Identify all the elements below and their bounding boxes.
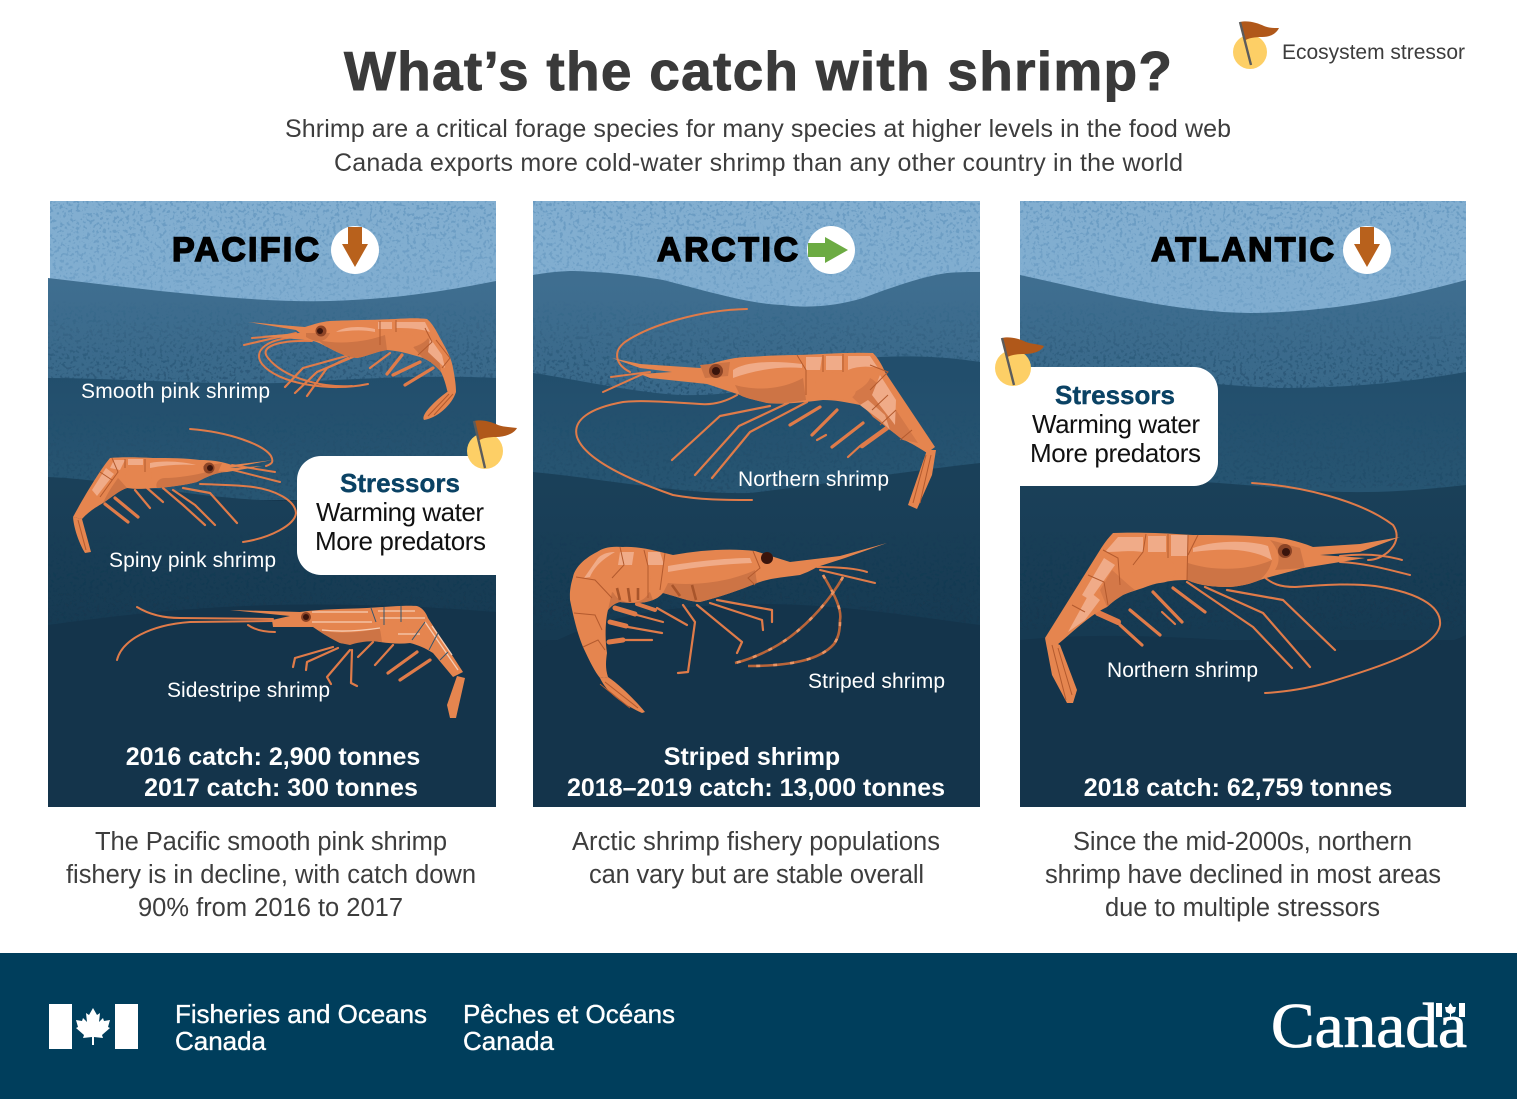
label: northern shrimp (atlantic): Northern shrimp (1107, 659, 1258, 682)
label: striped shrimp: Striped shrimp (808, 670, 945, 693)
label: northern shrimp (arctic): Northern shrimp (738, 468, 889, 491)
callout: pacific stressors: More predators (315, 526, 486, 556)
shrimp: spiny pink (73, 429, 296, 553)
shrimp: sidestripe (117, 606, 465, 718)
callout: atlantic stressors (995, 337, 1218, 486)
caption: atlantic (1045, 828, 1441, 922)
heading: atlantic: ATLANTIC (1151, 231, 1334, 269)
caption: atlantic: Since the mid-2000s, northern (1073, 828, 1412, 856)
icon: stressor flag (995, 337, 1044, 386)
caption: pacific: The Pacific smooth pink shrimp (95, 828, 447, 856)
text: department name french: Pêches et Océans (463, 999, 675, 1029)
wordmark: canada: Canada (1271, 991, 1467, 1061)
catch figures: pacific: 2016 catch: 2,900 tonnes (126, 743, 420, 771)
callout: pacific stressors (297, 420, 517, 575)
icon: down arrow (1343, 226, 1391, 274)
subtitle: Shrimp are a critical forage species for many species at higher levels in the food web (285, 115, 1231, 143)
panel: atlantic (995, 201, 1466, 807)
icon: stressor flag (1233, 21, 1279, 69)
text: department name english (175, 999, 427, 1056)
legend: ecosystem stressor (1233, 21, 1465, 69)
shrimp: northern (atlantic) (1045, 483, 1440, 703)
subtitle (285, 115, 1231, 177)
panel: pacific (48, 201, 517, 807)
text: department name english: Fisheries and Oceans (175, 999, 427, 1029)
catch figures: arctic: 2018–2019 catch: 13,000 tonnes (567, 774, 945, 802)
legend: ecosystem stressor: Ecosystem stressor (1282, 41, 1465, 64)
subtitle: Canada exports more cold-water shrimp than any other country in the world (334, 149, 1183, 177)
icon: down arrow (331, 226, 379, 274)
heading: arctic: ARCTIC (657, 231, 798, 269)
catch figures: arctic: Striped shrimp (664, 743, 840, 771)
catch figures: pacific: 2017 catch: 300 tonnes (144, 774, 418, 802)
footer (0, 953, 1517, 1099)
catch figures: arctic (567, 743, 945, 802)
shrimp: northern (arctic) (576, 309, 936, 509)
caption: pacific (66, 828, 476, 922)
callout: atlantic stressors: More predators (1030, 438, 1201, 468)
shrimp: smooth pink (244, 318, 456, 420)
caption: arctic: can vary but are stable overall (589, 861, 924, 889)
caption: pacific: 90% from 2016 to 2017 (138, 894, 403, 922)
catch figures: atlantic: 2018 catch: 62,759 tonnes (1084, 774, 1392, 802)
text: department name english: Canada (175, 1026, 267, 1056)
caption: pacific: fishery is in decline, with catch down (66, 861, 476, 889)
callout: atlantic stressors: Warming water (1032, 409, 1200, 439)
label: spiny pink shrimp: Spiny pink shrimp (109, 549, 276, 572)
callout: pacific stressors: Stressors (340, 468, 460, 498)
panel: arctic (533, 201, 980, 807)
callout: atlantic stressors: Stressors (1055, 380, 1175, 410)
icon: stressor flag (467, 420, 517, 469)
title: What’s the catch with shrimp? (344, 40, 1172, 102)
icon: canada flag (49, 1004, 138, 1049)
caption: atlantic: shrimp have declined in most areas (1045, 861, 1441, 889)
shrimp: striped (570, 543, 887, 713)
label: smooth pink shrimp: Smooth pink shrimp (81, 380, 270, 403)
text: department name french: Canada (463, 1026, 555, 1056)
label: sidestripe shrimp: Sidestripe shrimp (167, 679, 330, 702)
catch figures: pacific (126, 743, 420, 802)
callout: pacific stressors: Warming water (316, 497, 484, 527)
heading: pacific: PACIFIC (172, 231, 319, 269)
caption: arctic (572, 828, 940, 889)
caption: atlantic: due to multiple stressors (1105, 894, 1380, 922)
icon: right arrow (807, 226, 855, 274)
caption: arctic: Arctic shrimp fishery populations (572, 828, 940, 856)
text: department name french (463, 999, 675, 1056)
